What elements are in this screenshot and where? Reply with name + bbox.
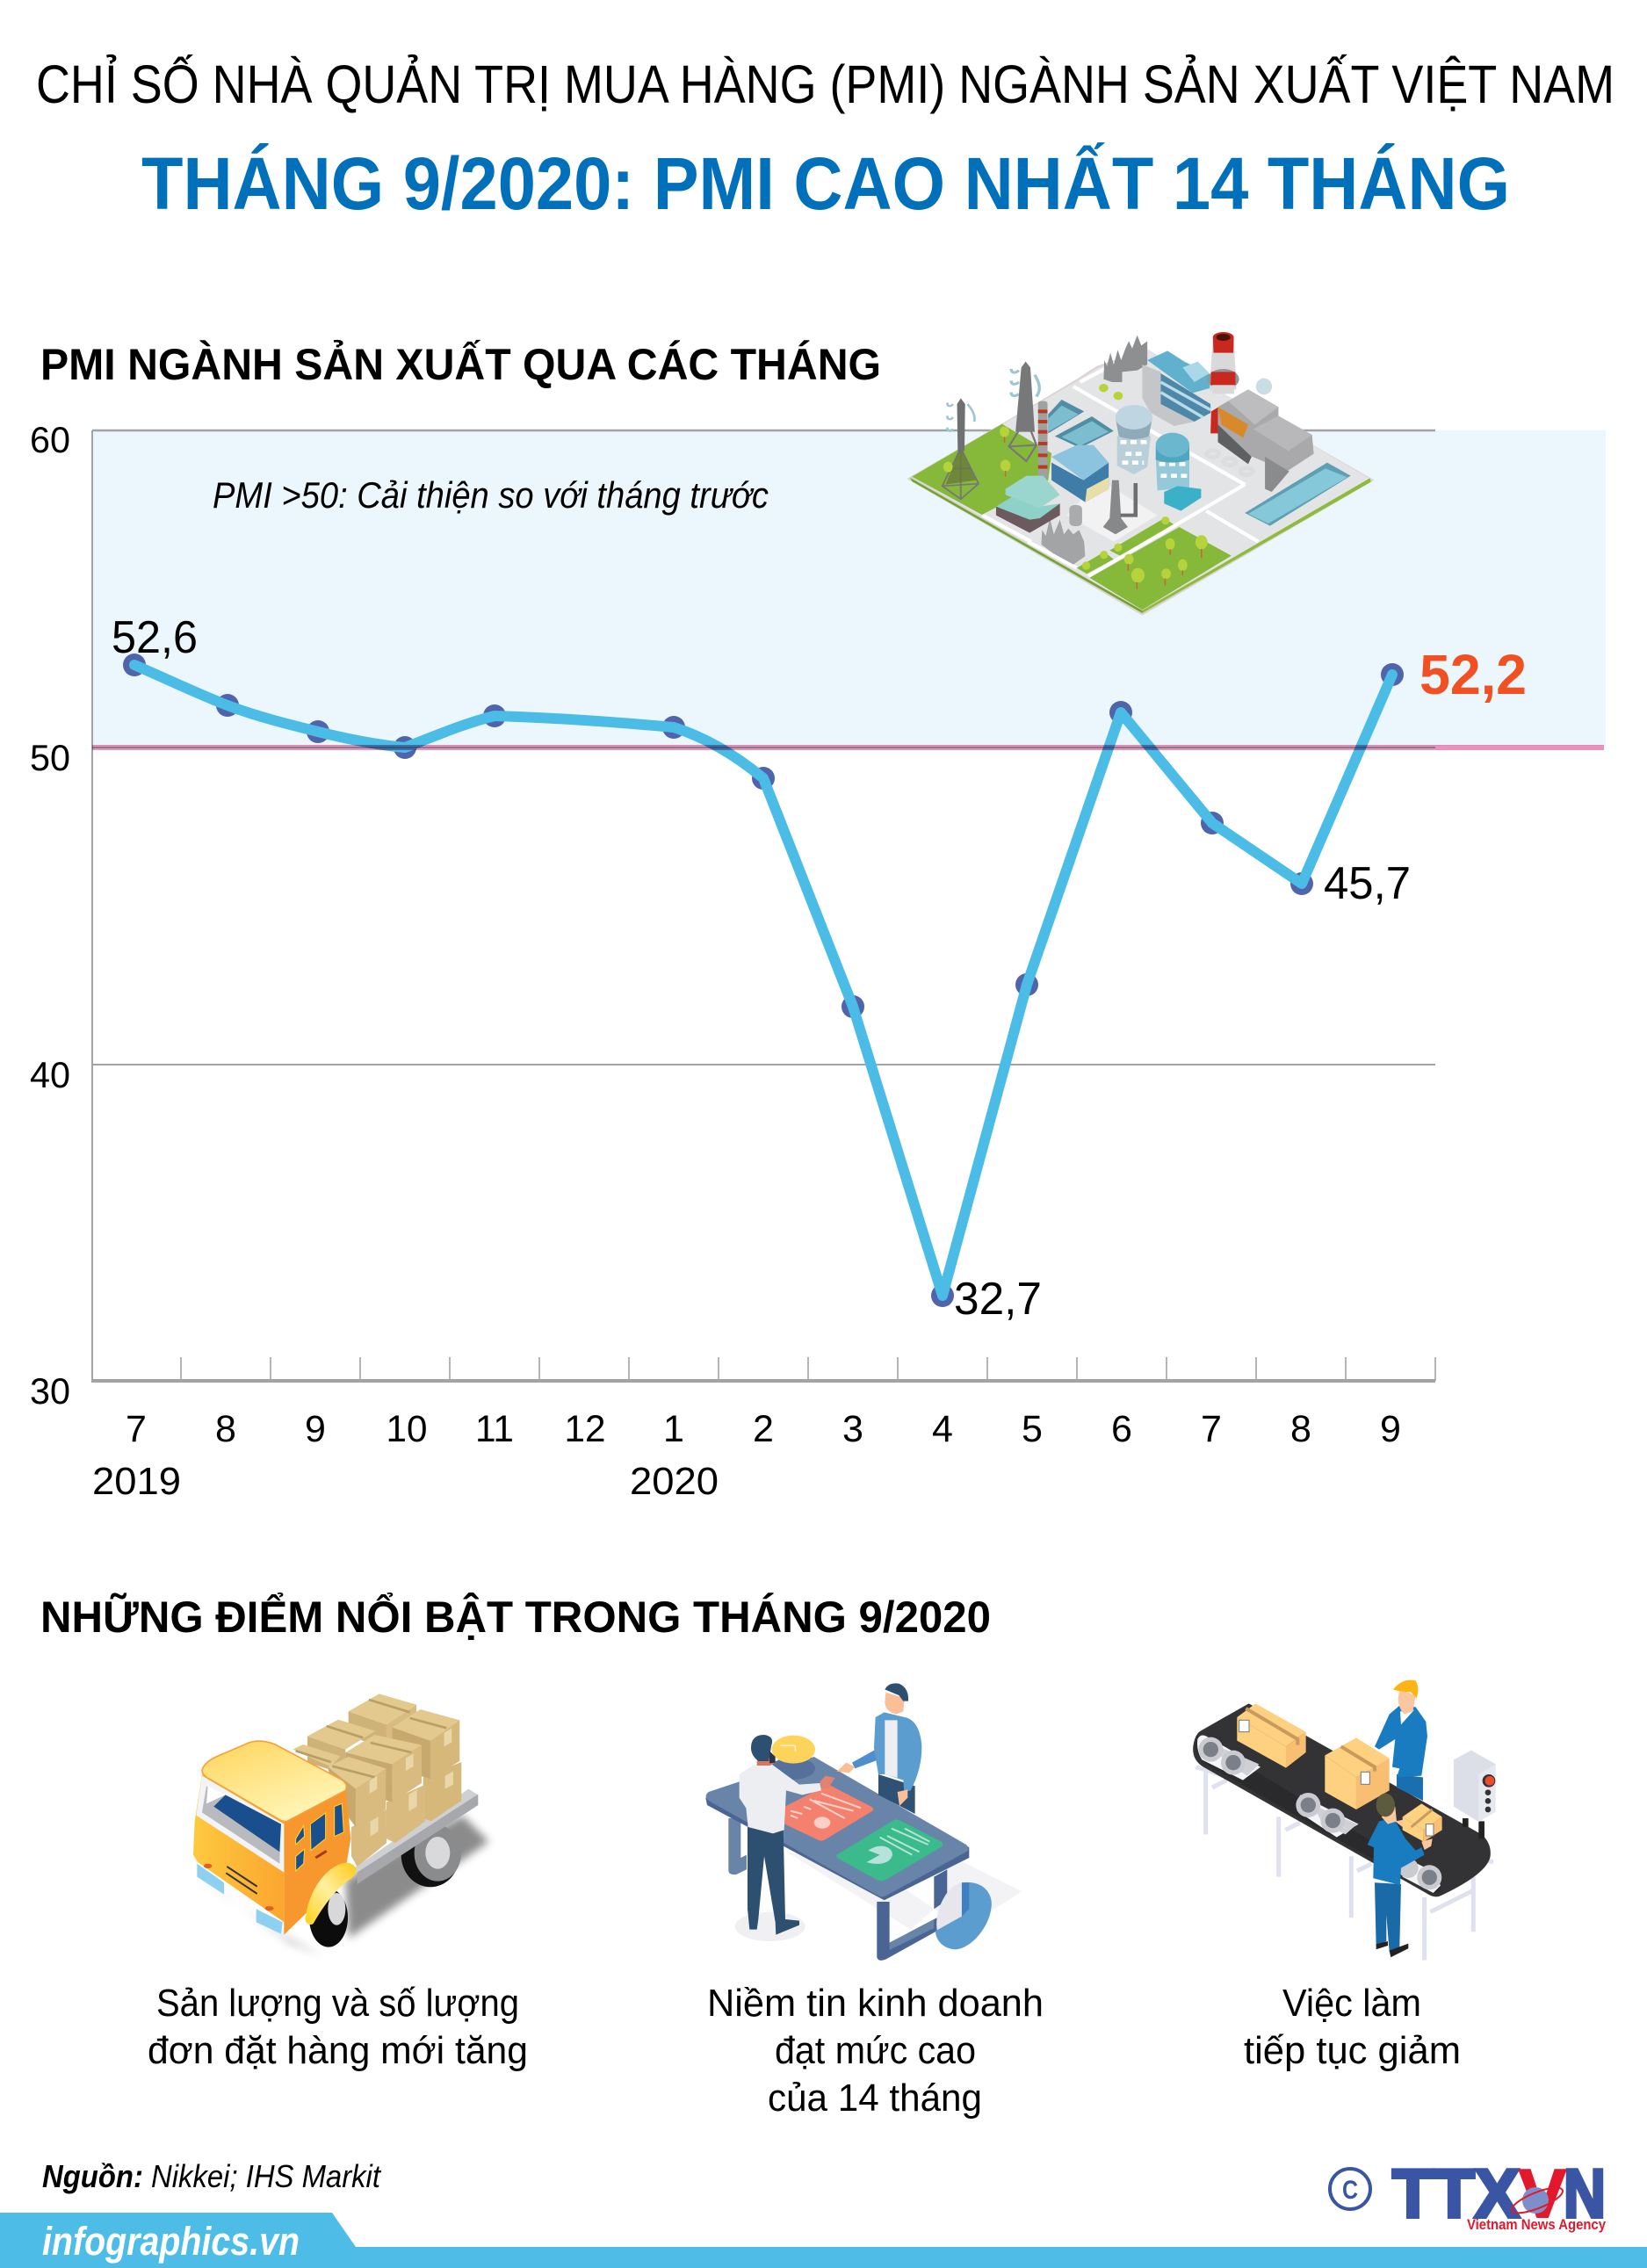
table top — [705, 1759, 969, 1900]
pie chart — [936, 1882, 964, 1930]
power tower middle — [1008, 369, 1039, 461]
wordmark: TTX — [1392, 2155, 1520, 2232]
table legs — [728, 1818, 747, 1874]
caption: Sản lượng và số lượng — [156, 1982, 519, 2025]
grey chimney — [1103, 480, 1128, 534]
cab roof — [202, 1741, 346, 1822]
caption — [1244, 1982, 1461, 2072]
trees — [943, 384, 1208, 582]
caption: đơn đặt hàng mới tăng — [148, 2029, 528, 2072]
caption: Việc làm — [1282, 1982, 1421, 2025]
y axis and grid — [91, 430, 1435, 1383]
y axis labels: 50 — [30, 737, 70, 778]
platform — [354, 1789, 478, 1874]
source note: Nguồn: Nikkei; IHS Markit — [42, 2158, 382, 2194]
caption — [707, 1982, 1044, 2120]
side windows — [296, 1803, 343, 1871]
x axis month labels: 9 — [305, 1408, 326, 1450]
striped chimney — [1038, 401, 1047, 479]
icon: conveyor workers — [1193, 1680, 1496, 1961]
grey factory — [1218, 389, 1314, 472]
worker front — [1375, 1882, 1401, 1952]
wordmark: V — [1519, 2155, 1566, 2232]
water towers — [1256, 379, 1272, 394]
panel: business confidence — [705, 1683, 1044, 2120]
caption: tiếp tục giảm — [1244, 2029, 1461, 2072]
y axis labels — [30, 419, 70, 1412]
x axis month labels: 7 — [1201, 1408, 1222, 1450]
blue building rear — [1142, 365, 1195, 426]
roller openings — [1197, 1736, 1441, 1893]
x axis month labels: 11 — [475, 1408, 514, 1450]
threshold line at 50 — [92, 745, 1604, 750]
orange document — [784, 1785, 873, 1841]
logo: TTXVN — [1330, 2155, 1606, 2233]
year labels: 2019 — [92, 1460, 181, 1503]
panel: output and new orders — [148, 1694, 528, 2072]
standing man right — [878, 1774, 915, 1814]
PMI line — [134, 665, 1392, 1296]
wordmark: N — [1564, 2155, 1606, 2232]
windshield — [196, 1776, 284, 1873]
bumper lights — [197, 1864, 224, 1895]
standing man left — [748, 1827, 799, 1935]
x axis month labels: 3 — [842, 1408, 863, 1450]
icon: meeting at table — [705, 1683, 1022, 1961]
data markers — [123, 654, 1404, 1307]
power tower left — [943, 402, 979, 499]
front wheel — [309, 1889, 348, 1947]
x axis month labels — [126, 1408, 1401, 1450]
small box — [1403, 1803, 1442, 1830]
transformer yards — [1042, 336, 1147, 565]
caption — [148, 1982, 528, 2072]
year labels — [92, 1460, 719, 1503]
rollers — [1198, 1737, 1441, 1889]
panel: employment — [1193, 1680, 1496, 2072]
copyright mark: C — [1342, 2176, 1358, 2205]
worker rear — [1397, 1774, 1423, 1801]
boxes — [293, 1694, 461, 1867]
title — [36, 54, 1614, 225]
icon: delivery truck — [193, 1694, 489, 1956]
fender — [305, 1863, 356, 1925]
title line 2: THÁNG 9/2020: PMI CAO NHẤT 14 THÁNG — [141, 142, 1510, 225]
year labels: 2020 — [630, 1460, 719, 1503]
caption: đạt mức cao — [775, 2029, 976, 2072]
caption: của 14 tháng — [768, 2077, 982, 2120]
value labels: 32,7 — [954, 1274, 1042, 1325]
y axis labels: 60 — [30, 419, 70, 460]
belt — [1193, 1703, 1491, 1896]
y axis labels: 40 — [30, 1054, 70, 1095]
x axis month labels: 10 — [386, 1408, 427, 1450]
y axis labels: 30 — [30, 1370, 70, 1412]
green roof building — [996, 503, 1060, 533]
x axis month labels: 4 — [932, 1408, 953, 1450]
x axis month labels: 7 — [126, 1408, 147, 1450]
heading: highlights section: NHỮNG ĐIỂM NỔI BẬT TRONG THÁNG 9/2020 — [40, 1592, 991, 1642]
yellow disc — [770, 1758, 815, 1780]
value labels — [112, 612, 1411, 1325]
icon: isometric factory — [907, 332, 1374, 616]
x axis month labels: 12 — [564, 1408, 606, 1450]
control panel — [1465, 1818, 1482, 1838]
red chimney — [1210, 336, 1237, 389]
value labels: 52,6 — [112, 612, 198, 663]
rear wheel — [401, 1823, 459, 1887]
website label: infographics.vn — [42, 2219, 300, 2264]
footer band — [0, 2213, 1647, 2268]
x axis month labels: 1 — [663, 1408, 684, 1450]
x axis month labels: 2 — [753, 1408, 774, 1450]
band: PMI above 50 — [92, 430, 1606, 746]
mid building — [1051, 463, 1109, 502]
cab side — [284, 1786, 350, 1935]
agency name: Vietnam News Agency — [1467, 2216, 1606, 2233]
heading: chart section: PMI NGÀNH SẢN XUẤT QUA CÁC THÁNG — [40, 340, 881, 389]
middle box — [1325, 1737, 1390, 1777]
line chart — [30, 419, 1606, 1503]
x axis month labels: 6 — [1111, 1408, 1132, 1450]
caption: Niềm tin kinh doanh — [707, 1982, 1044, 2025]
x axis month labels: 8 — [1290, 1408, 1311, 1450]
x axis month labels: 5 — [1022, 1408, 1043, 1450]
x axis month labels: 9 — [1380, 1408, 1401, 1450]
value labels: 45,7 — [1324, 858, 1411, 909]
copyright mark — [1330, 2169, 1370, 2209]
green document — [837, 1819, 943, 1882]
band note: PMI >50: Cải thiện so với tháng trước — [213, 474, 769, 516]
wordmark — [1392, 2155, 1606, 2232]
big box — [1237, 1703, 1306, 1746]
stand — [1196, 1767, 1493, 1961]
cab front — [193, 1774, 284, 1922]
highlighted value: 52,2 — [1419, 643, 1527, 706]
x axis month labels: 8 — [215, 1408, 236, 1450]
